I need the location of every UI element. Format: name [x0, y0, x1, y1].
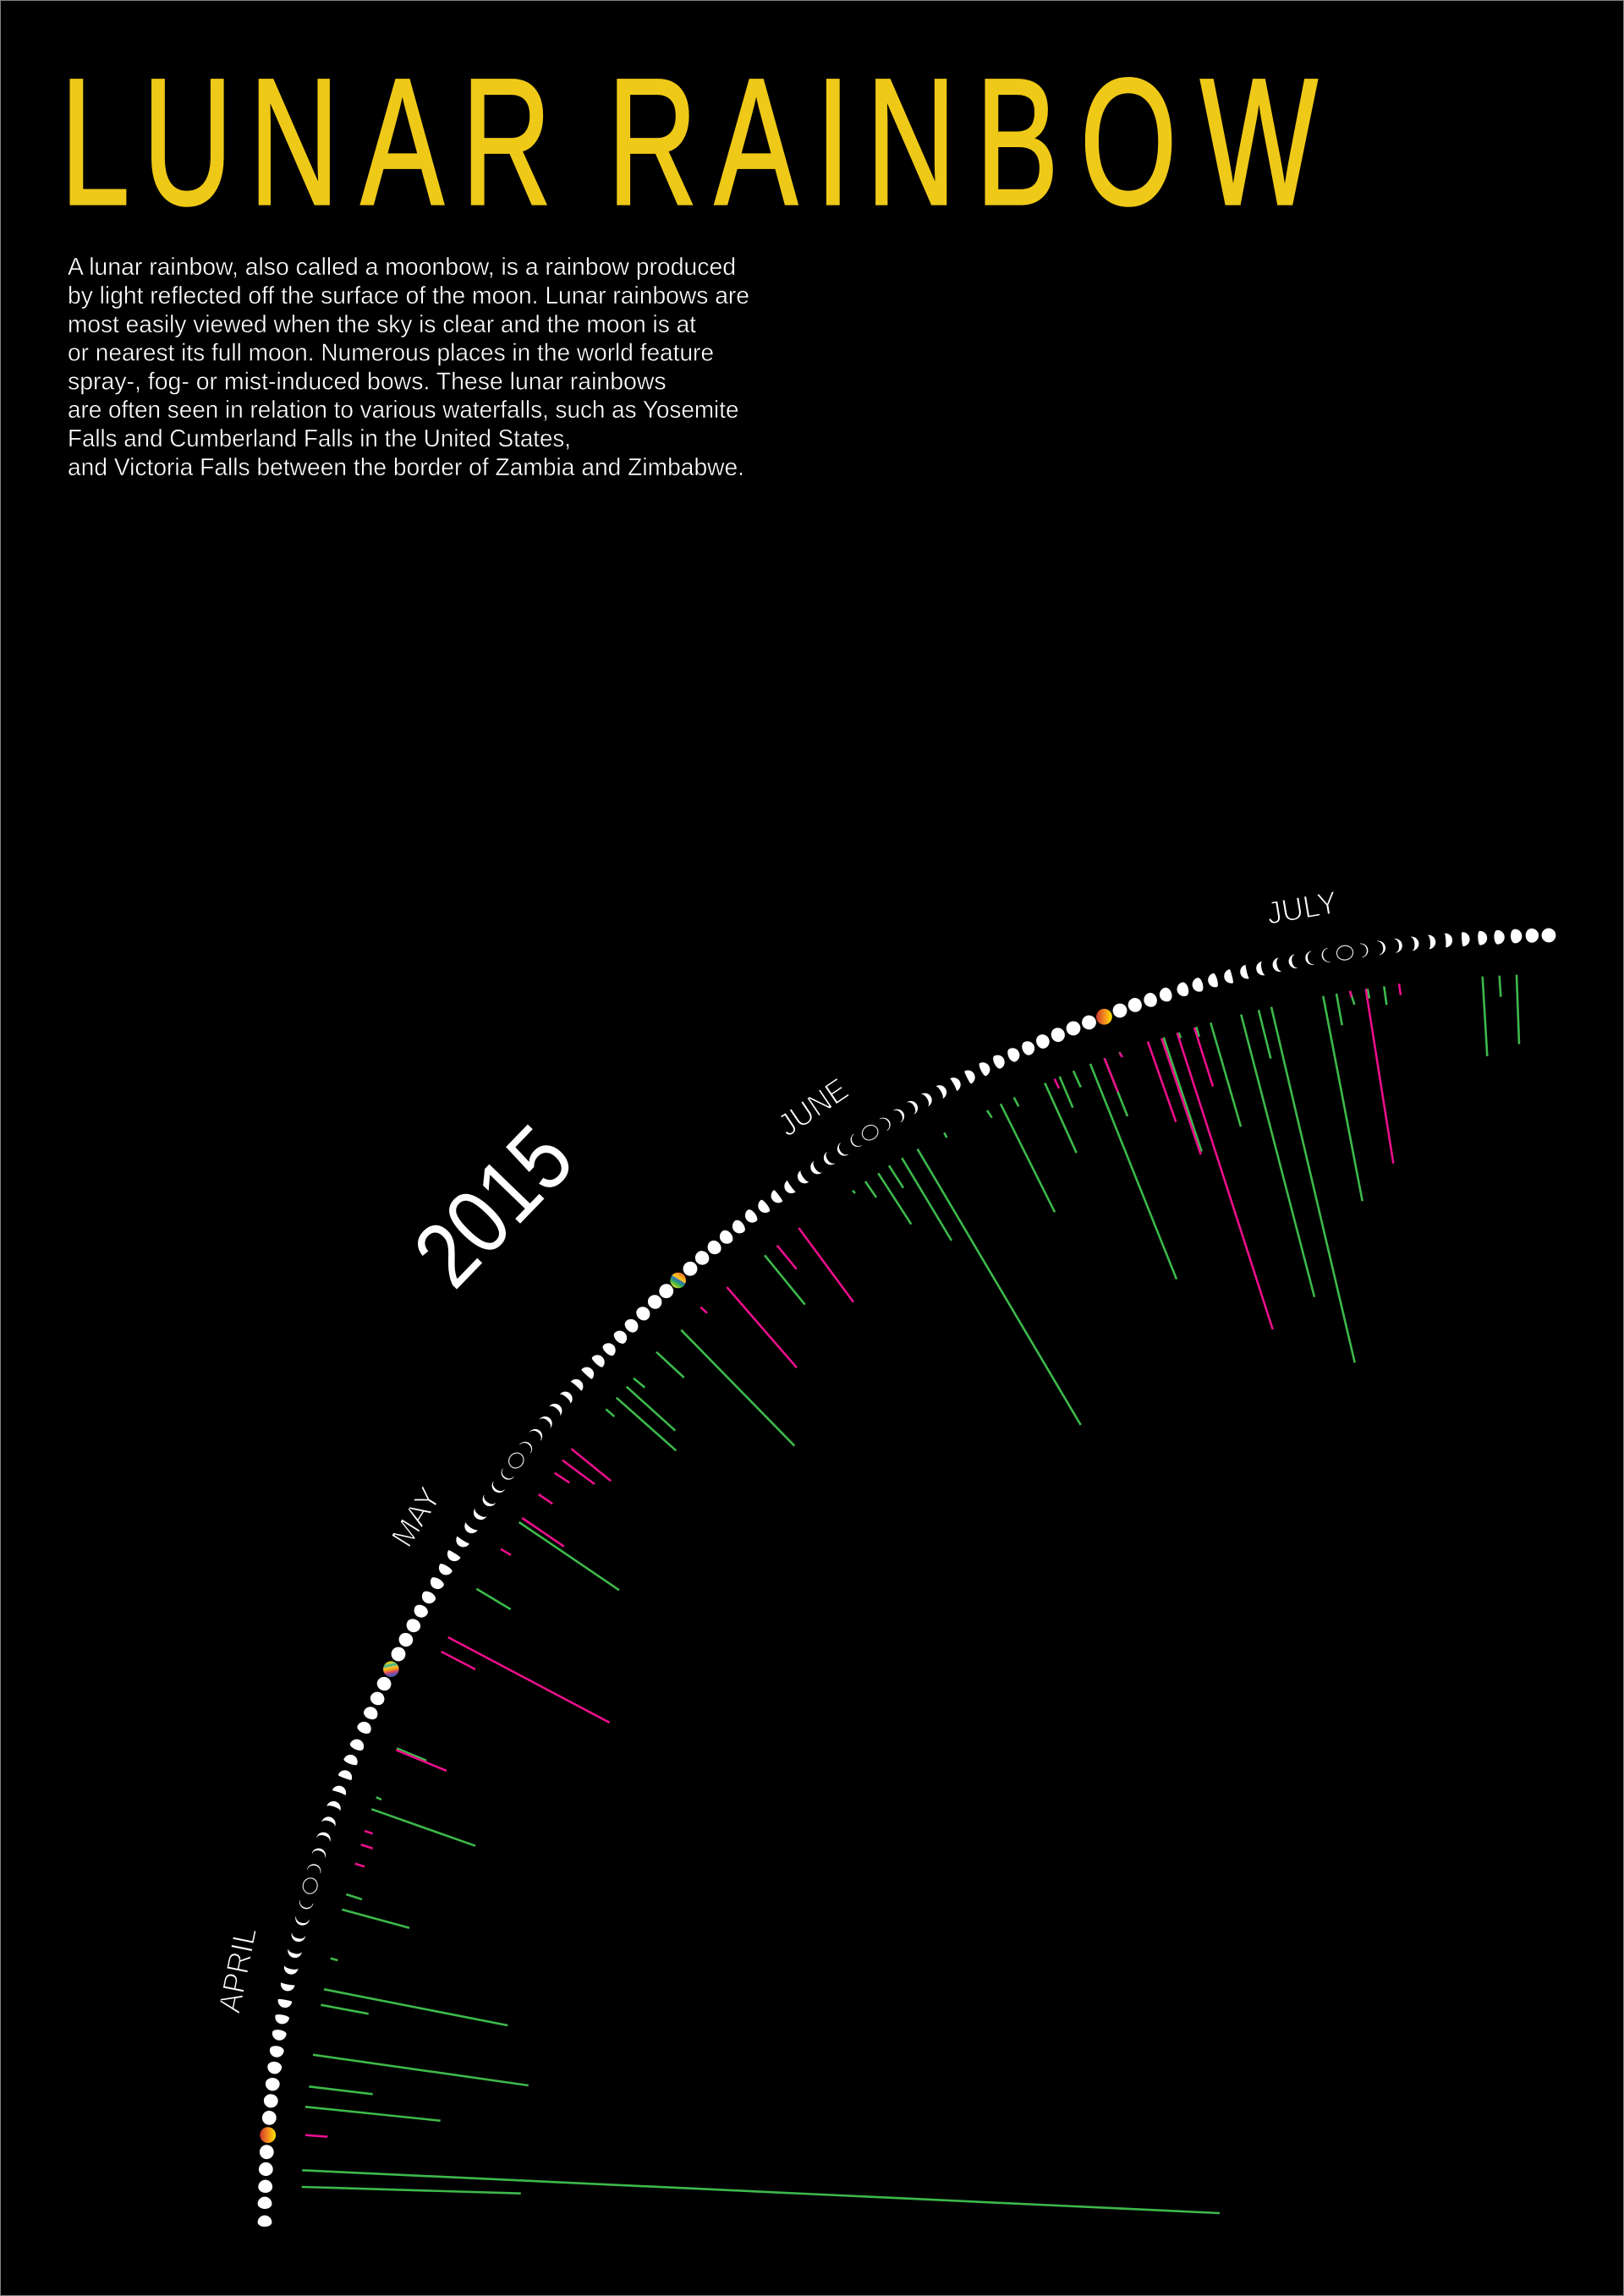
new moon ring: June — [859, 1122, 881, 1143]
moon phase arc — [258, 929, 1555, 2227]
year label: 2015 — [394, 1106, 592, 1306]
intro text block: or nearest its full moon. Numerous places in the world feature — [68, 340, 714, 367]
full moon: orange, July — [1096, 1009, 1112, 1025]
full moon: orange, April — [260, 2127, 276, 2143]
intro text block: are often seen in relation to various waterfalls, such as Yosemite — [68, 397, 739, 424]
month label: May: MAY — [384, 1481, 447, 1553]
new moon ring: July — [1336, 945, 1354, 961]
month label: July: JULY — [1264, 885, 1340, 931]
green sighting lines — [302, 975, 1519, 2213]
intro text block — [68, 254, 749, 481]
new moon ring: April — [301, 1877, 319, 1895]
title: LUNAR RAINBOW — [60, 41, 1318, 243]
pink sighting lines — [305, 984, 1401, 2137]
intro text block: A lunar rainbow, also called a moonbow, is a rainbow produced — [68, 254, 736, 281]
intro text block: most easily viewed when the sky is clear and the moon is at — [68, 311, 696, 338]
full moon: rainbow, May — [383, 1661, 399, 1677]
full moon: rainbow, June — [670, 1273, 686, 1288]
month label: April: APRIL — [211, 1924, 263, 2016]
month label: June: JUNE — [771, 1071, 854, 1143]
new moon ring: May — [506, 1450, 527, 1471]
intro text block: Falls and Cumberland Falls in the United States, — [68, 425, 571, 452]
intro text block: and Victoria Falls between the border of Zambia and Zimbabwe. — [68, 454, 744, 481]
intro text block: by light reflected off the surface of the moon. Lunar rainbows are — [68, 282, 749, 310]
intro text block: spray-, fog- or mist-induced bows. These lunar rainbows — [68, 369, 667, 396]
